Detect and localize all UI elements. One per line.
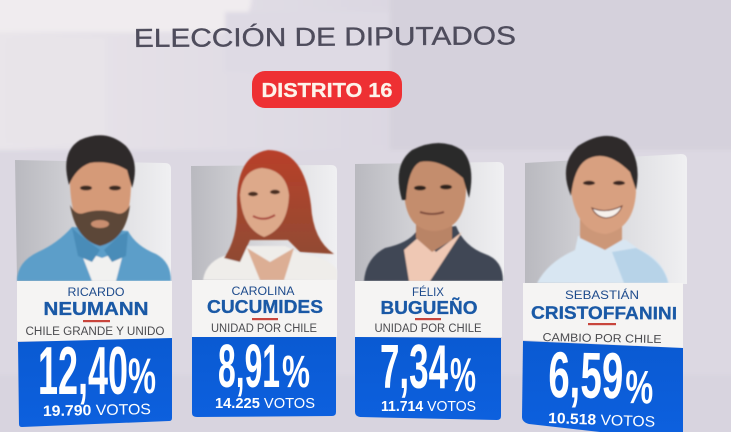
portrait: Carolina Cucumides (203, 150, 337, 280)
result panel: 6,59 (548, 338, 624, 412)
result panel: 12,40 (38, 333, 128, 409)
badge: distrito 16 (252, 71, 402, 108)
result panel: % (128, 348, 156, 404)
name panel: BUGUEÑO (380, 297, 478, 318)
name panel: SEBASTIÁN (565, 289, 639, 302)
portrait: Félix Bugueño (364, 143, 503, 281)
result panel (522, 338, 683, 432)
name panel: RICARDO (68, 287, 125, 299)
portrait: Ricardo Neumann (17, 135, 171, 281)
name panel (17, 281, 172, 341)
name panel (192, 280, 337, 337)
result panel: 10.518 VOTOS (548, 410, 655, 431)
result panel: 7,34 (380, 333, 448, 402)
name panel: CHILE GRANDE Y UNIDO (26, 326, 165, 338)
result panel: % (282, 346, 310, 397)
photo panel (522, 136, 687, 432)
name panel: CRISTOFFANINI (531, 303, 677, 323)
card: Félix Bugueño (355, 143, 504, 420)
result panel: % (625, 360, 654, 413)
title: ELECCIÓN DE DIPUTADOS (134, 20, 516, 53)
photo panel (191, 150, 337, 417)
name panel: CAROLINA (232, 286, 295, 298)
result panel: 19.790 VOTOS (43, 401, 151, 420)
name panel: UNIDAD POR CHILE (211, 323, 317, 335)
result panel (18, 333, 172, 427)
name panel: CUCUMIDES (207, 297, 323, 317)
name panel: FÉLIX (412, 286, 444, 299)
photo panel (355, 143, 504, 420)
result panel (355, 333, 501, 420)
name panel: CAMBIO POR CHILE (542, 332, 662, 346)
result panel: 14.225 VOTOS (215, 396, 315, 412)
portrait: Sebastián Cristoffanini (537, 136, 669, 283)
name panel: UNIDAD POR CHILE (374, 323, 482, 335)
result panel (192, 332, 336, 417)
result panel: 8,91 (218, 332, 280, 400)
name panel (523, 283, 683, 348)
name panel (355, 281, 502, 337)
card: Sebastián Cristoffanini (522, 136, 687, 432)
result panel: % (450, 348, 476, 401)
photo panel (15, 135, 172, 427)
card: Ricardo Neumann (15, 135, 172, 427)
name panel: NEUMANN (44, 298, 148, 319)
card: Carolina Cucumides (191, 150, 337, 417)
badge: distrito 16: DISTRITO 16 (262, 79, 392, 102)
result panel: 11.714 VOTOS (381, 399, 476, 415)
